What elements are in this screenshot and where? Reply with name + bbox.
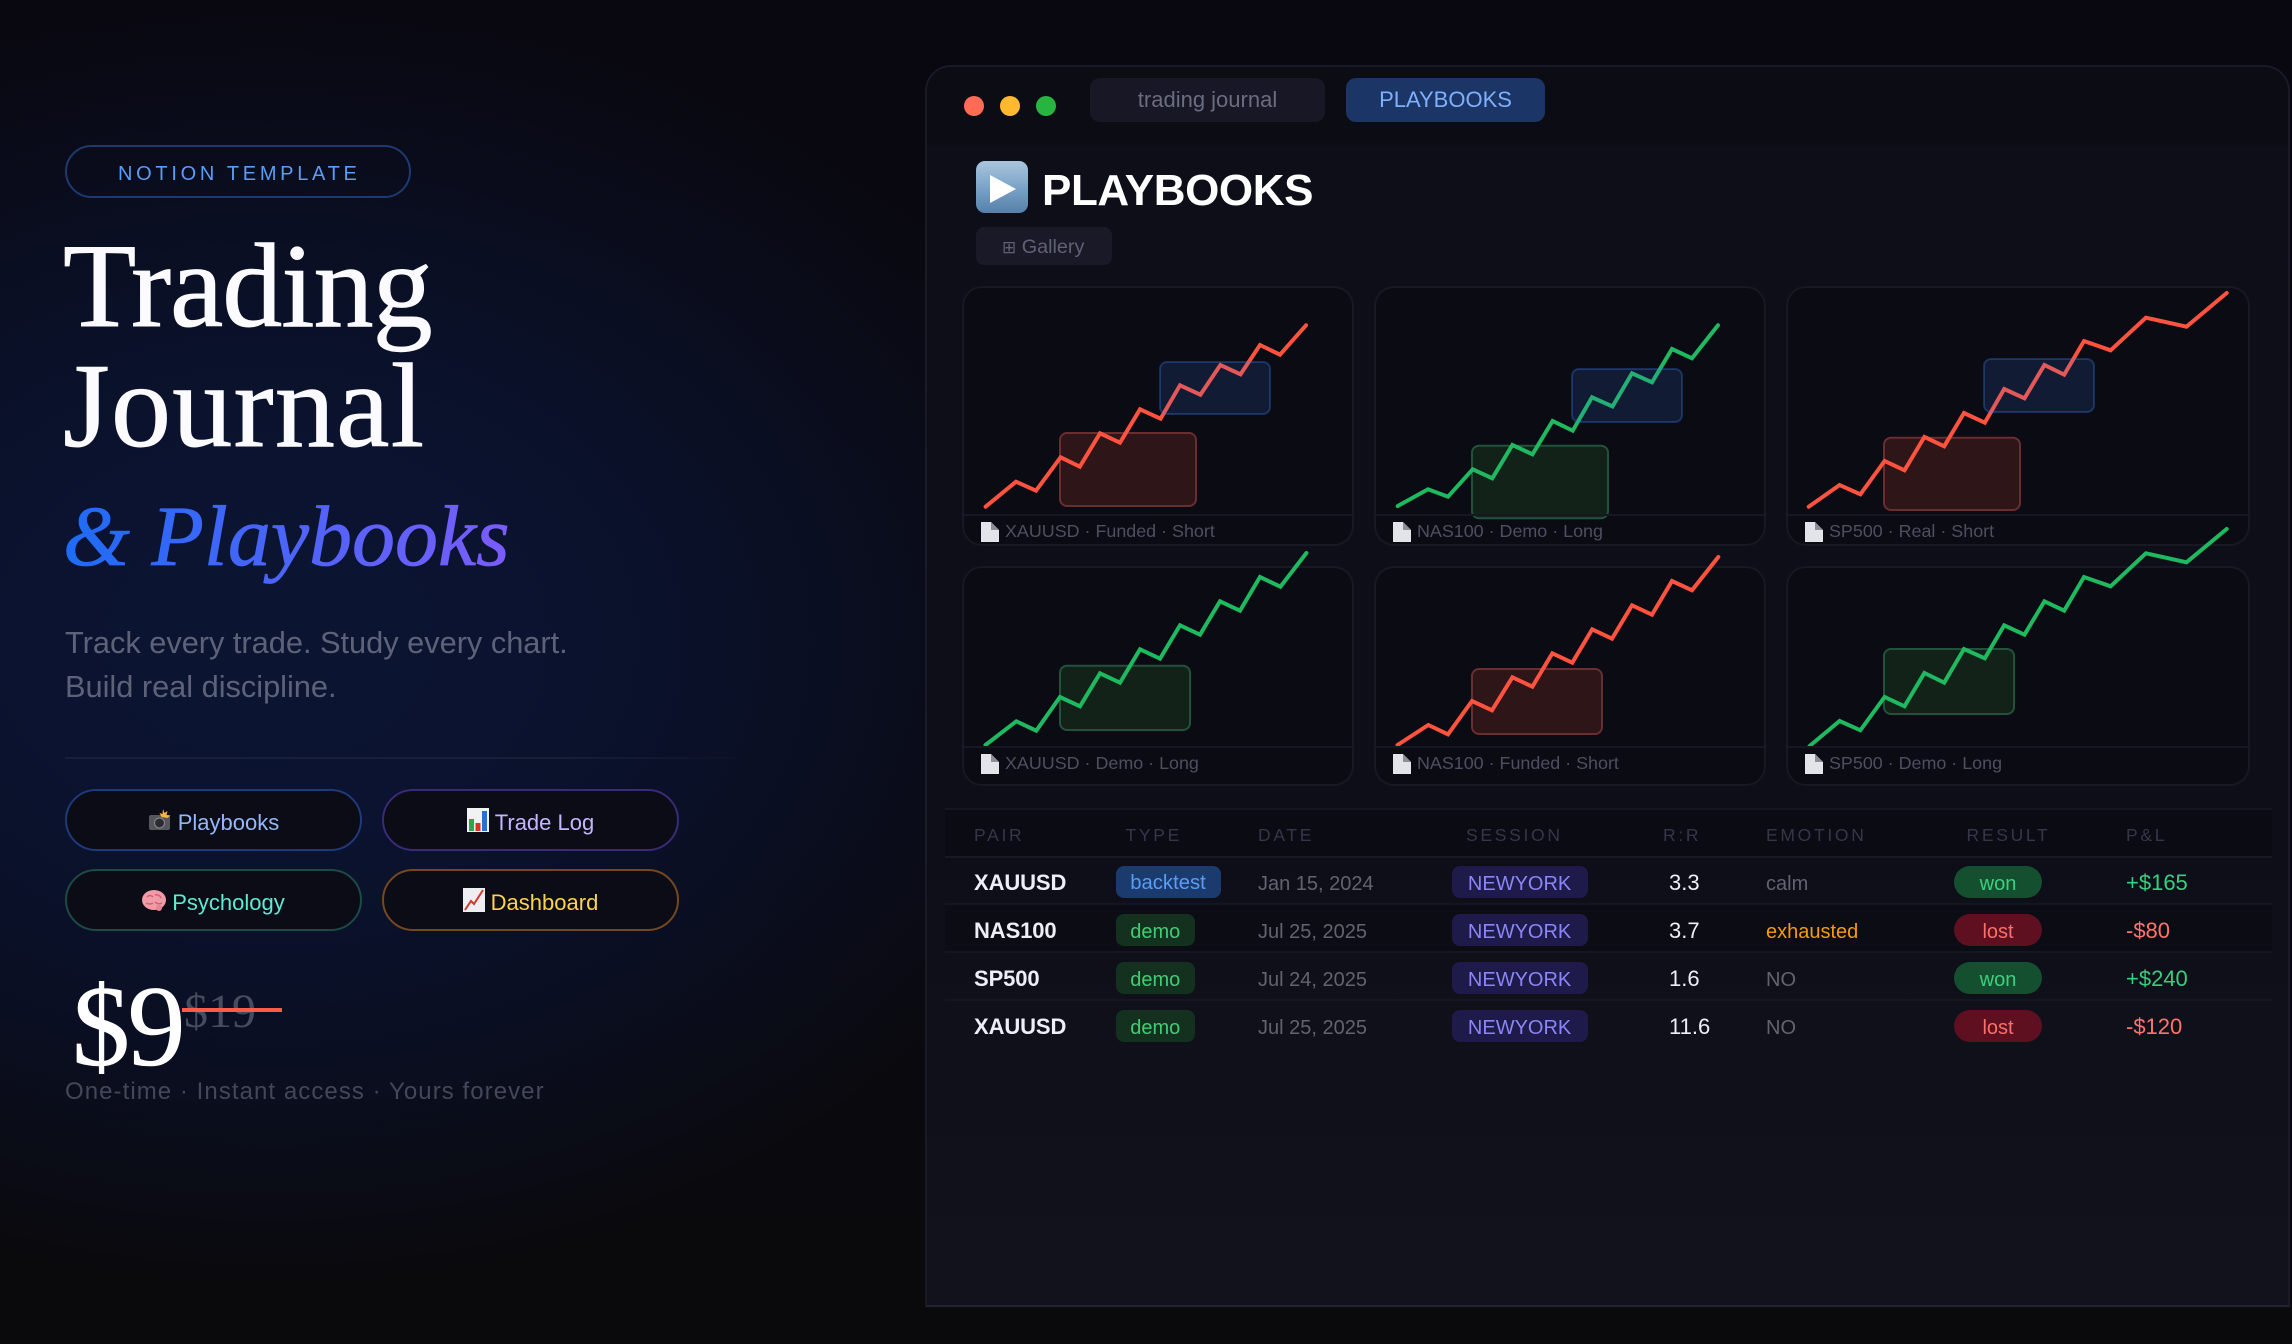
row: SP500 demo: +$240 bbox=[2126, 966, 2188, 991]
chart bbox=[1808, 526, 2229, 748]
tagline: Build real discipline. bbox=[65, 669, 337, 704]
icon: play button bbox=[976, 161, 1028, 213]
window controls bbox=[964, 96, 1056, 116]
row: XAUUSD backtest: NEWYORK bbox=[1468, 872, 1571, 894]
panel: left promo column bbox=[63, 145, 679, 1105]
chart bbox=[984, 323, 1308, 509]
row: SP500 demo: demo bbox=[1130, 968, 1180, 990]
row: NAS100 demo bbox=[945, 905, 2272, 953]
row: NAS100 demo: demo bbox=[1130, 920, 1180, 942]
row: XAUUSD demo: XAUUSD bbox=[974, 1014, 1066, 1039]
row: NAS100 demo: Jul 25, 2025 bbox=[1258, 920, 1367, 942]
card: XAUUSD Funded Short bbox=[962, 286, 1354, 546]
pill: Dashboard bbox=[382, 869, 679, 931]
caption: XAUUSD · Demo · Long bbox=[1005, 753, 1199, 773]
table header: DATE bbox=[1258, 825, 1314, 845]
caption: NAS100 · Funded · Short bbox=[1417, 753, 1619, 773]
title bbox=[63, 218, 432, 472]
heading: PLAYBOOKS: PLAYBOOKS bbox=[1042, 166, 1313, 215]
card: NAS100 Demo Long bbox=[1374, 286, 1766, 546]
pill: Playbooks: Playbooks bbox=[178, 810, 279, 834]
row: XAUUSD demo: NEWYORK bbox=[1468, 1016, 1571, 1038]
row: XAUUSD demo: Jul 25, 2025 bbox=[1258, 1016, 1367, 1038]
chart bbox=[983, 550, 1308, 746]
table header: RESULT bbox=[1966, 825, 2050, 845]
table header: R:R bbox=[1663, 825, 1701, 845]
table header: P&L bbox=[2126, 825, 2167, 845]
pill: Psychology bbox=[65, 869, 362, 931]
table header: SESSION bbox=[1466, 825, 1563, 845]
old price: $19 bbox=[184, 985, 256, 1038]
pill: Trade Log: Trade Log bbox=[495, 810, 594, 834]
title: Trading bbox=[63, 218, 432, 352]
card: SP500 Real Short bbox=[1786, 286, 2250, 546]
chart bbox=[1395, 554, 1720, 746]
view chip: Gallery: ⊞ Gallery bbox=[1002, 236, 1084, 258]
row: SP500 demo: SP500 bbox=[974, 966, 1040, 991]
card: SP500 Demo Long bbox=[1786, 566, 2250, 786]
caption: SP500 · Demo · Long bbox=[1829, 753, 2002, 773]
row: XAUUSD demo bbox=[974, 1010, 2182, 1042]
tab: PLAYBOOKS: PLAYBOOKS bbox=[1379, 87, 1512, 112]
row: XAUUSD backtest: XAUUSD bbox=[974, 870, 1066, 895]
caption: NAS100 · Demo · Long bbox=[1417, 521, 1603, 541]
current price: $9 bbox=[72, 963, 183, 1091]
row: NAS100 demo: -$80 bbox=[2126, 918, 2170, 943]
row: XAUUSD demo: NO bbox=[1766, 1016, 1796, 1038]
table header: PAIR bbox=[974, 825, 1024, 845]
row: XAUUSD backtest: calm bbox=[1766, 872, 1808, 894]
pill: Psychology: Psychology bbox=[172, 890, 285, 914]
table header: EMOTION bbox=[1766, 825, 1867, 845]
caption: XAUUSD · Funded · Short bbox=[1005, 521, 1215, 541]
row: XAUUSD backtest: +$165 bbox=[2126, 870, 2188, 895]
row: XAUUSD demo: demo bbox=[1130, 1016, 1180, 1038]
row: SP500 demo: NO bbox=[1766, 968, 1796, 990]
row: SP500 demo: won bbox=[1980, 968, 2016, 990]
pill: Playbooks bbox=[65, 789, 362, 851]
row: SP500 demo: Jul 24, 2025 bbox=[1258, 968, 1367, 990]
table: trades bbox=[945, 808, 2272, 1042]
chart bbox=[1806, 290, 2229, 511]
card: XAUUSD Demo Long bbox=[962, 566, 1354, 786]
table header: TYPE bbox=[1126, 825, 1182, 845]
row: XAUUSD backtest bbox=[945, 857, 2272, 905]
row: XAUUSD backtest: backtest bbox=[1130, 872, 1206, 894]
pill: Trade Log bbox=[382, 789, 679, 851]
tagline bbox=[65, 625, 568, 704]
pill: Dashboard: Dashboard bbox=[491, 890, 598, 914]
tab: PLAYBOOKS bbox=[1346, 78, 1545, 122]
subtitle: and Playbooks: & Playbooks bbox=[63, 488, 510, 584]
card: NAS100 Funded Short bbox=[1374, 566, 1766, 786]
row: SP500 demo: 1.6 bbox=[1669, 966, 1700, 991]
panel: app window bbox=[925, 65, 2290, 1307]
chart bbox=[1396, 323, 1720, 520]
view chip: Gallery bbox=[976, 227, 1112, 265]
row: NAS100 demo: NAS100 bbox=[974, 918, 1057, 943]
tab: trading journal bbox=[1090, 78, 1325, 122]
row: NAS100 demo: 3.7 bbox=[1669, 918, 1700, 943]
row: SP500 demo bbox=[945, 953, 2272, 1001]
row: XAUUSD demo: lost bbox=[1982, 1016, 2014, 1038]
badge: Notion template bbox=[65, 145, 411, 198]
row: XAUUSD backtest: won bbox=[1980, 872, 2016, 894]
title: Journal bbox=[63, 338, 425, 472]
caption: SP500 · Real · Short bbox=[1829, 521, 1994, 541]
strikethrough bbox=[182, 1008, 282, 1012]
row: NAS100 demo: exhausted bbox=[1766, 920, 1858, 942]
table header bbox=[945, 808, 2272, 858]
tagline: Track every trade. Study every chart. bbox=[65, 625, 568, 660]
badge: Notion template: NOTION TEMPLATE bbox=[118, 162, 361, 184]
price note: One-time · Instant access · Yours forever bbox=[65, 1078, 545, 1105]
tab: trading journal: trading journal bbox=[1138, 87, 1277, 112]
row: NAS100 demo: lost bbox=[1982, 920, 2014, 942]
row: XAUUSD demo: -$120 bbox=[2126, 1014, 2182, 1039]
price bbox=[72, 963, 282, 1091]
row: SP500 demo: NEWYORK bbox=[1468, 968, 1571, 990]
row: NAS100 demo: NEWYORK bbox=[1468, 920, 1571, 942]
row: XAUUSD backtest: Jan 15, 2024 bbox=[1258, 872, 1374, 894]
row: XAUUSD backtest: 3.3 bbox=[1669, 870, 1700, 895]
row: XAUUSD demo: 11.6 bbox=[1669, 1014, 1710, 1039]
